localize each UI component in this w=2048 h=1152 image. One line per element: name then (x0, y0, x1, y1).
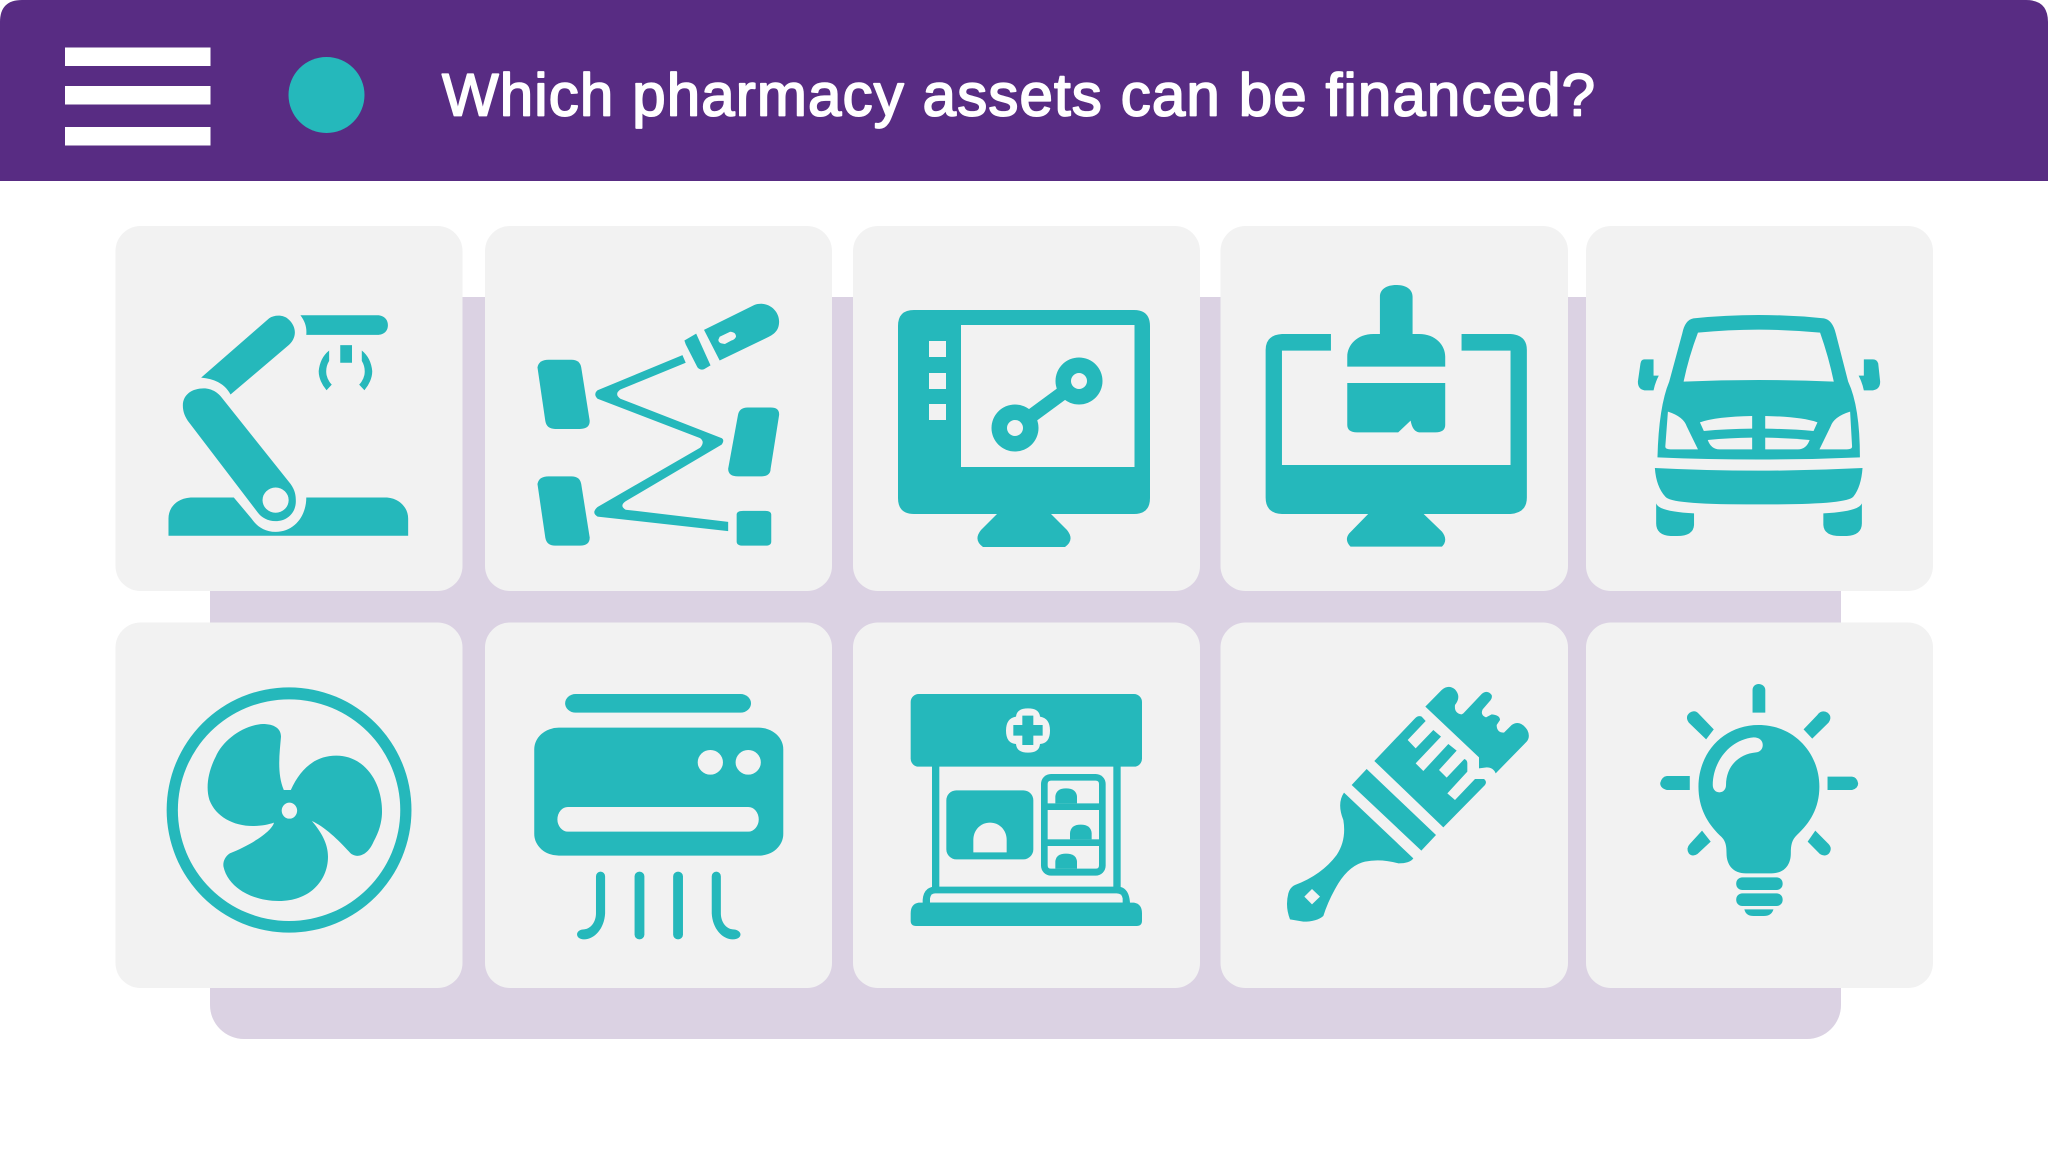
card (1220, 622, 1568, 988)
card (485, 226, 832, 591)
icon: computer monitor with link (898, 310, 1150, 547)
panel: pharmacy premises (853, 622, 1200, 988)
panel: machinery parts (485, 226, 832, 591)
card (485, 622, 832, 988)
card (1586, 622, 1933, 988)
panel: air conditioning (485, 622, 832, 988)
icon: light bulb (1660, 684, 1858, 916)
icon: hamburger menu (65, 48, 210, 146)
icon: ventilation fan (167, 687, 411, 933)
header background (0, 0, 2048, 181)
panel: computer hardware (853, 226, 1200, 591)
card (1586, 226, 1933, 591)
panel: fan (116, 622, 462, 988)
card (853, 622, 1200, 988)
icon: robot arm (168, 315, 408, 536)
icon: air conditioner (534, 694, 783, 939)
card (116, 226, 462, 591)
panel: decorating (1220, 622, 1568, 988)
background purple panel (210, 297, 1841, 1039)
icon: monitor with paint brush (1266, 285, 1527, 547)
icon: van front (1638, 315, 1880, 536)
icon: robotic picker (537, 304, 779, 546)
panel: lighting (1586, 622, 1933, 988)
icon: teal circle (288, 57, 364, 133)
icon: paint brush (1287, 687, 1529, 922)
icon: pharmacy shop (911, 694, 1142, 926)
panel: website design (1220, 226, 1568, 591)
card (116, 622, 462, 988)
header bar (0, 0, 2048, 181)
title: Which pharmacy assets can be financed? (442, 62, 1595, 128)
card (853, 226, 1200, 591)
panel: delivery van (1586, 226, 1933, 591)
card (1220, 226, 1568, 591)
panel: robot arm (116, 226, 462, 591)
